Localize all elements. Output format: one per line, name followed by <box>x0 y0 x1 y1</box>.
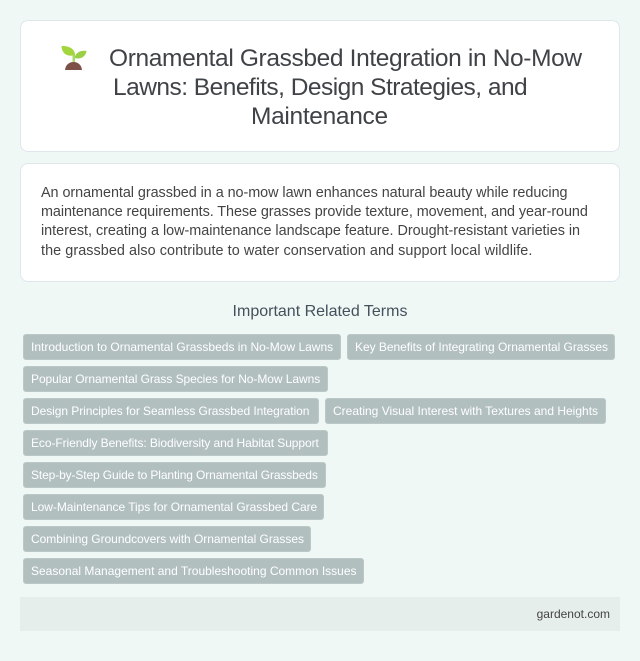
panel: summary <box>20 163 620 282</box>
tag <box>347 334 615 360</box>
footer bar <box>20 597 620 631</box>
tag <box>325 398 606 424</box>
title: Maintenance <box>251 103 388 130</box>
tag: Eco-Friendly Benefits: Biodiversity and Habitat Support <box>31 436 319 450</box>
tag: Step-by-Step Guide to Planting Ornamental Grassbeds <box>31 468 318 482</box>
heading: related terms: Important Related Terms <box>233 303 407 320</box>
tag: Popular Ornamental Grass Species for No-Mow Lawns <box>31 372 320 386</box>
panel: header <box>20 20 620 152</box>
icon: seedling <box>62 46 86 70</box>
tag: Low-Maintenance Tips for Ornamental Grassbed Care <box>31 500 317 514</box>
tag <box>23 462 326 488</box>
term tags <box>23 334 615 584</box>
tag: Key Benefits of Integrating Ornamental Grasses <box>355 340 608 354</box>
tag: Creating Visual Interest with Textures and Heights <box>333 404 598 418</box>
summary text: An ornamental grassbed in a no-mow lawn enhances natural beauty while reducing <box>41 185 567 201</box>
tag <box>23 494 324 520</box>
tag <box>23 398 319 424</box>
tag: Combining Groundcovers with Ornamental Grasses <box>31 532 304 546</box>
summary text: the grassbed also contribute to water conservation and support local wildlife. <box>41 243 532 259</box>
title <box>109 45 582 130</box>
summary text: maintenance requirements. These grasses provide texture, movement, and year-round <box>41 204 588 220</box>
title: Lawns: Benefits, Design Strategies, and <box>113 74 527 101</box>
tag <box>23 558 364 584</box>
tag <box>23 366 328 392</box>
footer source text: gardenot.com <box>537 607 610 621</box>
tag: Introduction to Ornamental Grassbeds in No-Mow Lawns <box>31 340 333 354</box>
tag <box>23 430 328 456</box>
tag <box>23 526 311 552</box>
summary text: interest, creating a low-maintenance landscape feature. Drought-resistant varieties in <box>41 223 580 239</box>
summary text <box>41 185 588 259</box>
title: Ornamental Grassbed Integration in No-Mow <box>109 45 582 72</box>
tag <box>23 334 341 360</box>
tag: Design Principles for Seamless Grassbed Integration <box>31 404 309 418</box>
tag: Seasonal Management and Troubleshooting Common Issues <box>31 564 357 578</box>
